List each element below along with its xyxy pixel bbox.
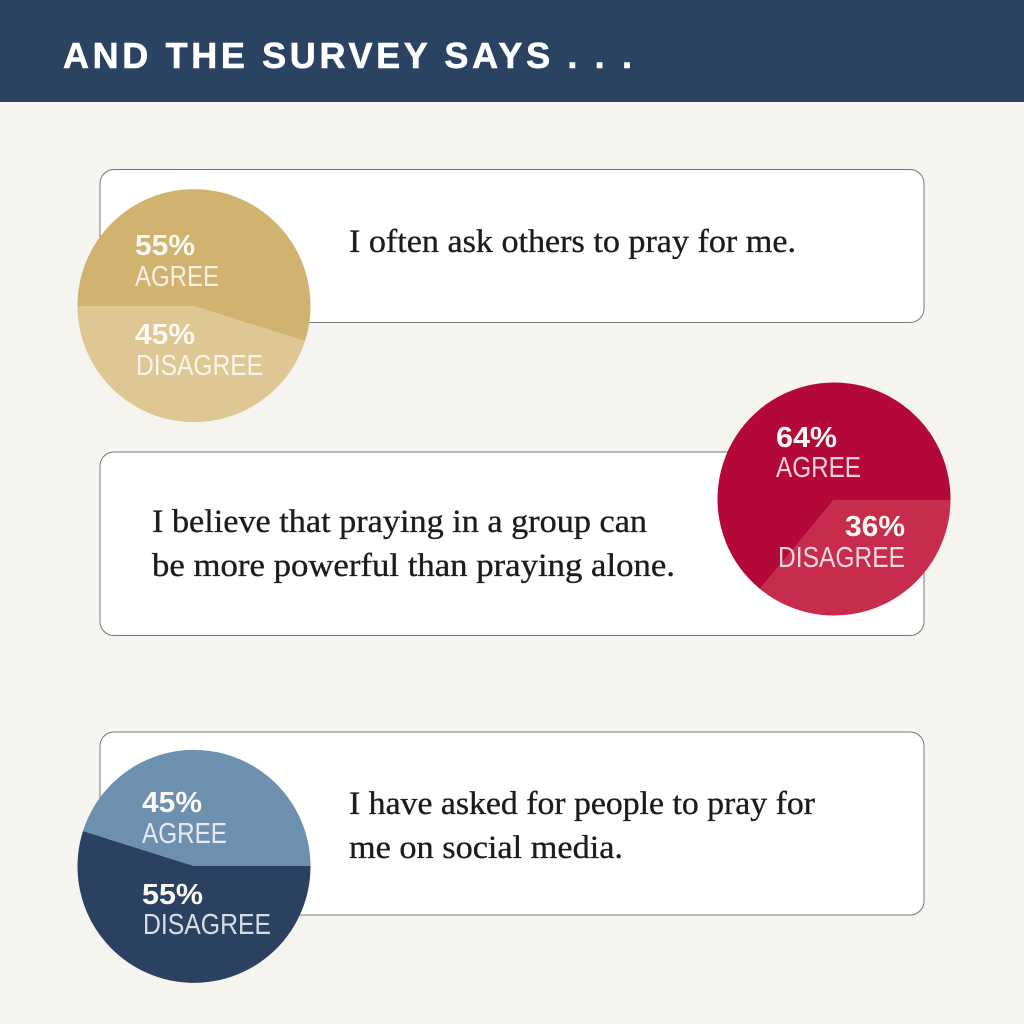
- agree label: 64%: [776, 422, 837, 454]
- statement 2 text: be more powerful than praying alone.: [152, 548, 675, 584]
- statement 2 text: I believe that praying in a group can: [152, 504, 647, 540]
- panel: statement 2: [100, 452, 924, 636]
- title: AND THE SURVEY SAYS . . .: [63, 35, 632, 76]
- panel: statement 1: [100, 170, 924, 322]
- header banner: [0, 0, 1024, 102]
- disagree label: DISAGREE: [136, 350, 263, 382]
- disagree label: DISAGREE: [143, 909, 271, 941]
- disagree label: [135, 319, 263, 382]
- agree label: [135, 230, 219, 293]
- statement 3 text: I have asked for people to pray for: [349, 786, 815, 822]
- pie chart: statement 2: [718, 383, 951, 616]
- agree label: AGREE: [776, 452, 861, 484]
- agree label: AGREE: [142, 818, 227, 850]
- panel: statement 3: [100, 732, 924, 915]
- agree label: 55%: [135, 230, 195, 262]
- disagree label: 45%: [135, 319, 195, 351]
- agree label: 45%: [142, 787, 202, 819]
- disagree label: [778, 511, 905, 574]
- pie chart: statement 3: [78, 750, 311, 983]
- agree label: [142, 787, 227, 850]
- pie chart: statement 1: [77, 189, 310, 422]
- statement 3 text: [349, 786, 815, 866]
- disagree label: 36%: [845, 511, 905, 543]
- disagree label: [142, 879, 271, 941]
- statement 2 text: [152, 504, 675, 584]
- agree label: AGREE: [135, 261, 219, 293]
- statement 3 text: me on social media.: [349, 830, 623, 866]
- statement 1 text: I often ask others to pray for me.: [349, 224, 796, 260]
- disagree label: 55%: [142, 879, 203, 911]
- agree label: [776, 422, 861, 484]
- disagree label: DISAGREE: [778, 542, 905, 574]
